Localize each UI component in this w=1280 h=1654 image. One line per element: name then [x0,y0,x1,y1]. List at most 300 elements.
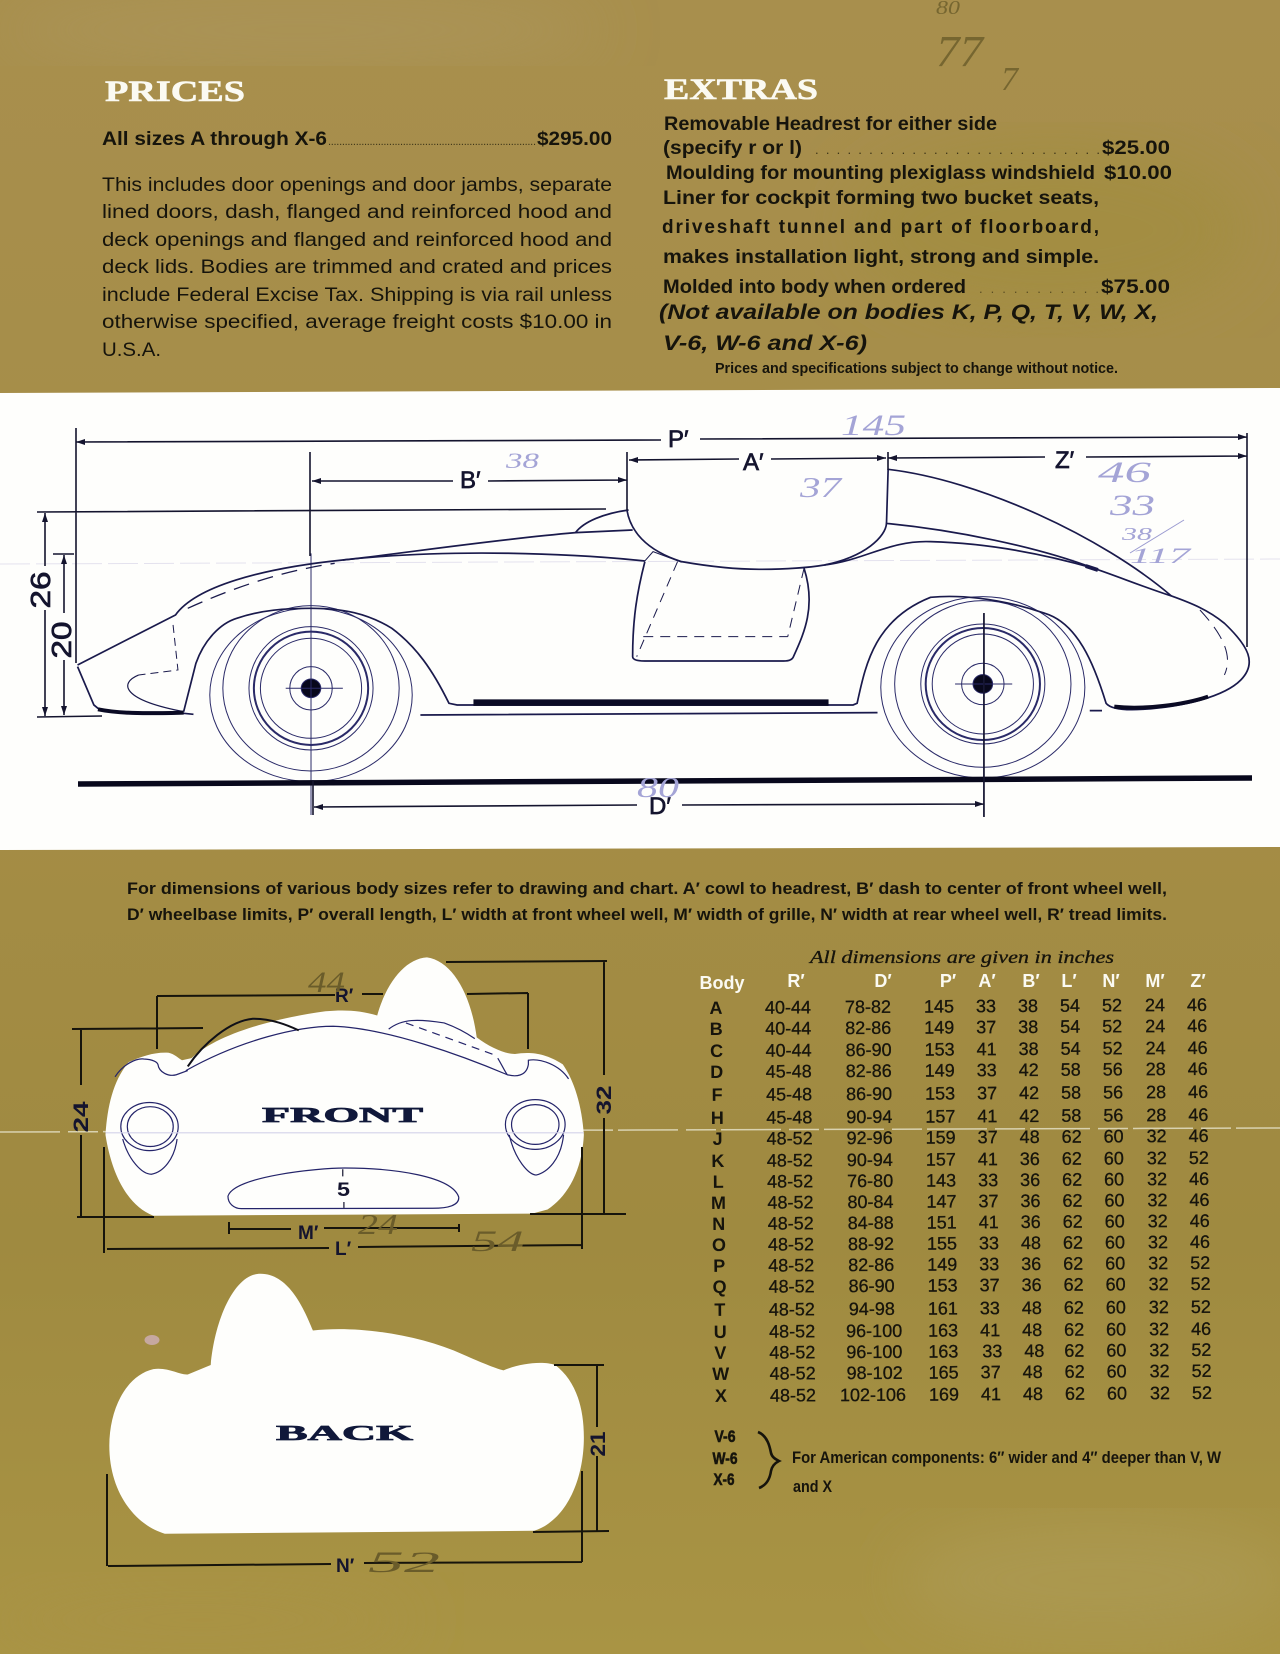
table header: L′ [1061,971,1077,991]
table rows: 163 [928,1341,958,1362]
table rows: 58 [1061,1106,1081,1126]
headrest fairing [888,469,1171,596]
table rows: 52 [1189,1148,1209,1168]
dimension labels [25,426,1075,820]
front view labels: 5 [337,1180,351,1201]
table rows: 84-88 [848,1213,894,1233]
back view labels [276,1421,610,1577]
table rows [709,995,1212,1406]
table rows: 62 [1063,1254,1083,1274]
table header [700,971,1206,993]
extras list: (specify r or l) [663,138,802,159]
table rows: 149 [927,1254,957,1275]
table rows: 147 [926,1191,957,1212]
handwritten numbers on front view: 24 [358,1210,398,1241]
table rows: 42 [1019,1106,1039,1126]
prices description: deck openings and flanged and reinforced hood and [102,230,612,251]
american components note: and X [793,1477,833,1496]
table rows: 48-52 [768,1276,815,1297]
table rows: 52 [1192,1361,1212,1381]
table rows: 60 [1106,1297,1126,1317]
table rows: 32 [1149,1319,1169,1339]
table rows: 33 [979,1233,999,1253]
prices description: otherwise specified, average freight costs $10.00 in [102,312,612,333]
table header: R′ [787,971,805,991]
table rows: 157 [925,1106,955,1127]
table rows: 60 [1105,1232,1125,1252]
handwritten notes top: 7 [1001,61,1020,98]
extras list: $10.00 [1104,163,1172,184]
heading: extras: EXTRAS [664,73,818,106]
front silhouette [105,957,584,1216]
table rows: 58 [1061,1060,1081,1080]
american components note [792,1448,1222,1496]
table rows: 36 [1020,1149,1040,1169]
table rows: 46 [1189,1169,1209,1189]
sills and bumpers [473,699,829,706]
price line: ........................................................................... [328,136,536,148]
table rows: 165 [929,1362,959,1383]
table rows: 36 [1020,1191,1041,1211]
front view labels: 24 [70,1101,93,1132]
table rows: 33 [976,996,996,1016]
table rows: 60 [1104,1126,1124,1146]
table rows: 40-44 [765,997,811,1018]
extras list: Prices and specifications subject to change without notice. [715,360,1118,377]
table rows: 163 [928,1320,958,1341]
extras list: Liner for cockpit forming two bucket seats, [663,188,1099,209]
table rows: T [714,1300,725,1320]
table rows: 96-100 [846,1321,902,1341]
table rows: 36 [1021,1275,1042,1295]
extras list: V-6, W-6 and X-6) [663,332,867,355]
table rows: 28 [1146,1105,1166,1125]
front view labels [70,986,616,1260]
table rows: 52 [1191,1297,1211,1317]
heading: prices: PRICES [105,75,245,108]
table rows: 42 [1019,1083,1039,1103]
table rows: 38 [1018,996,1038,1016]
back silhouette [109,1274,584,1534]
table rows: 32 [1150,1361,1170,1381]
hood dashes [188,563,335,608]
table rows: 62 [1065,1384,1085,1404]
table rows: 62 [1062,1149,1082,1169]
table rows: 45-48 [766,1107,812,1128]
table rows: 52 [1102,1016,1122,1036]
handwritten pencil numbers on side view [504,409,1192,804]
table rows: 46 [1189,1190,1210,1210]
table header: P′ [940,971,956,991]
table rows: 159 [926,1127,956,1148]
explanatory note: For dimensions of various body sizes refer to drawing and chart. A′ cowl to headrest, B′ dash to center of front wheel well, [127,879,1167,898]
table rows: 60 [1105,1274,1126,1294]
table rows: 60 [1106,1340,1126,1360]
back view dimension lines [107,1365,609,1566]
table rows: 52 [1190,1253,1210,1273]
table rows: 60 [1104,1169,1124,1189]
table rows: 46 [1187,1016,1207,1036]
handwritten notes top: 77 [936,27,985,76]
panel: extras [659,73,1172,377]
table rows: 48 [1020,1127,1040,1147]
handwritten numbers on front view [308,966,524,1258]
prices description: deck lids. Bodies are trimmed and crated and prices [102,257,612,278]
table rows: 41 [977,1106,997,1126]
table rows: V [714,1343,726,1363]
table rows: 62 [1064,1298,1084,1318]
table rows: 48-52 [767,1192,814,1213]
table rows: 40-44 [765,1018,811,1039]
back view labels: N′ [336,1556,355,1577]
table rows: 52 [1190,1274,1211,1294]
table rows: 41 [979,1212,999,1232]
handwritten pencil numbers on side view: 117 [1130,543,1192,568]
table rows: A [709,998,723,1018]
handwritten pencil numbers on side view: 145 [841,409,906,442]
table rows: 48 [1022,1320,1042,1340]
car side profile [78,469,1249,817]
table rows: 24 [1145,1016,1165,1036]
table rows: 33 [980,1298,1000,1318]
table header: M′ [1145,971,1165,991]
table rows: 52 [1102,1038,1123,1058]
extras list: . . . . . . . . . . . . . . . . . . . . . . . . . . . [815,142,1100,157]
table rows: 24 [1145,995,1165,1015]
table rows: 48-52 [767,1150,813,1171]
front view labels: R′ [335,986,354,1007]
back view labels: 21 [587,1431,610,1456]
table rows: 36 [1021,1254,1041,1274]
table rows: 48 [1021,1233,1041,1253]
handwritten pencil numbers on side view: 46 [1098,456,1151,489]
handwritten numbers on front view: 54 [471,1225,524,1258]
panel: prices [102,75,612,361]
six-cylinder body codes: W-6 [712,1449,738,1468]
table rows: 82-86 [846,1061,892,1081]
table rows: B [710,1019,723,1039]
table rows: 46 [1187,995,1207,1015]
table rows: 62 [1063,1275,1084,1295]
table rows: 48-52 [770,1385,816,1406]
front wheel [210,553,412,815]
table rows: 60 [1104,1148,1124,1168]
table rows: 60 [1104,1190,1125,1210]
price line [102,129,612,150]
table rows: 98-102 [847,1363,903,1383]
table rows: 32 [1147,1190,1168,1210]
table rows: 36 [1020,1170,1040,1190]
table rows: 54 [1060,1017,1080,1037]
table rows: 36 [1021,1212,1041,1232]
table rows: 58 [1061,1083,1081,1103]
table rows: 153 [924,1039,955,1060]
dimension labels: A′ [743,449,764,476]
six-cylinder body codes: X-6 [714,1470,734,1489]
table rows: 32 [1148,1211,1168,1231]
extras list: Removable Headrest for either side [664,114,997,135]
table rows: 96-100 [846,1342,902,1362]
table rows: 102-106 [840,1385,906,1405]
table header: Z′ [1190,971,1206,991]
table rows: 143 [926,1170,956,1191]
table rows: 48-52 [767,1128,813,1149]
table rows: 153 [927,1275,958,1296]
table rows: 38 [1018,1017,1038,1037]
paper spot [144,1335,160,1345]
table rows: 60 [1106,1319,1126,1339]
prices description: This includes door openings and door jambs, separate [102,175,612,196]
panel: front view [70,957,626,1260]
table rows: 80-84 [847,1192,894,1212]
table rows: 86-90 [848,1276,895,1296]
table header: A′ [978,971,996,991]
table rows: 48 [1023,1384,1043,1404]
table rows: 155 [927,1233,957,1254]
front view labels: M′ [298,1223,319,1244]
table caption: All dimensions are given in inches [809,947,1114,967]
table rows: 41 [978,1149,998,1169]
table rows: 46 [1191,1319,1211,1339]
handwritten pencil numbers on side view: 33 [1108,489,1155,522]
panel: dimension table [700,947,1222,1496]
table rows: 62 [1064,1320,1084,1340]
table rows: N [712,1214,725,1234]
table rows: 48-52 [768,1255,814,1276]
table header: B′ [1022,971,1040,991]
table rows: 151 [927,1212,957,1233]
front view labels: 32 [593,1086,616,1114]
table rows: 149 [925,1060,955,1081]
table rows: 48-52 [768,1234,814,1255]
table rows: 52 [1192,1383,1212,1403]
table rows: 32 [1150,1383,1170,1403]
table rows: 145 [924,996,954,1017]
explanatory note [127,879,1167,924]
table rows: W [712,1364,729,1384]
extras list: driveshaft tunnel and part of floorboard, [662,217,1099,238]
handwritten number on back view: 52 [368,1546,440,1579]
extras list: Moulding for mounting plexiglass windshield [666,163,1095,184]
table rows: 45-48 [766,1084,812,1105]
price line: $295.00 [537,129,612,150]
table rows: 32 [1147,1169,1167,1189]
dimension labels: P′ [668,426,689,453]
table rows: 37 [978,1127,998,1147]
table rows: 161 [928,1298,958,1319]
table rows: 48 [1023,1362,1043,1382]
table rows: 60 [1107,1383,1127,1403]
prices description [102,175,612,361]
table rows: 62 [1062,1170,1082,1190]
table rows: 37 [979,1275,1000,1295]
table rows: 48-52 [769,1299,815,1320]
table rows: O [712,1235,726,1255]
handwritten pencil numbers on side view: 38 [1120,524,1152,544]
table rows: U [714,1322,727,1342]
table rows: 62 [1063,1233,1083,1253]
front view labels: FRONT [262,1103,423,1127]
prices description: include Federal Excise Tax. Shipping is via rail unless [102,285,612,306]
table rows: 54 [1060,1039,1081,1059]
table rows: 169 [929,1384,959,1405]
table rows: 33 [979,1254,999,1274]
table rows: 32 [1149,1297,1169,1317]
table rows: 46 [1190,1232,1210,1252]
table rows: 24 [1145,1038,1166,1058]
table rows: P [713,1256,725,1276]
extras list: $75.00 [1101,277,1170,298]
table rows: 37 [977,1083,997,1103]
table rows: 56 [1103,1059,1123,1079]
table rows: 54 [1060,996,1080,1016]
table rows: 90-94 [847,1150,893,1170]
table rows: 62 [1063,1212,1083,1232]
table rows: 60 [1105,1211,1125,1231]
table rows: 32 [1148,1274,1169,1294]
dimension labels: 20 [46,622,77,658]
table rows: 48 [1024,1341,1044,1361]
back view labels: BACK [276,1421,414,1445]
table rows: 52 [1191,1340,1211,1360]
table rows: H [711,1108,724,1128]
door [633,562,809,661]
brace [758,1432,779,1488]
panel: back view [107,1274,610,1579]
table rows: 157 [926,1149,956,1170]
extras list: $25.00 [1102,138,1170,159]
handwritten pencil numbers on side view: 38 [504,448,539,473]
table rows: 52 [1102,995,1122,1015]
table rows: 48-52 [770,1363,816,1384]
table rows: 37 [981,1362,1001,1382]
table header: D′ [874,971,892,991]
table rows: 41 [976,1039,997,1059]
table rows: 48-52 [768,1213,814,1234]
table rows: 62 [1062,1127,1082,1147]
table rows: 62 [1064,1341,1084,1361]
table rows: 32 [1147,1126,1167,1146]
table rows: 45-48 [766,1061,812,1082]
extras list: . . . . . . . . . . . [979,281,1099,296]
table rows: 28 [1146,1082,1166,1102]
table rows: 86-90 [845,1040,892,1060]
extras list: makes installation light, strong and simple. [663,247,1099,268]
dimension labels: D′ [649,793,671,820]
table rows: 94-98 [849,1299,895,1319]
american components note: For American components: 6″ wider and 4″ deeper than V, W [792,1448,1222,1467]
table rows: 76-80 [847,1171,893,1191]
table header: N′ [1102,971,1120,991]
table rows: 48-52 [769,1342,815,1363]
front view line work [105,1019,584,1209]
extras list: (Not available on bodies K, P, Q, T, V, W, X, [659,301,1158,324]
table rows: 90-94 [846,1107,892,1127]
table rows: 56 [1103,1082,1123,1102]
table rows: 37 [978,1191,999,1211]
table rows: 46 [1187,1038,1208,1058]
table rows: 41 [981,1384,1001,1404]
table rows: K [711,1151,724,1171]
table rows: 42 [1019,1060,1039,1080]
table rows: M [711,1193,726,1213]
prices description: U.S.A. [102,340,161,361]
dimension labels: B′ [460,467,481,494]
table rows: 28 [1146,1059,1166,1079]
table rows: 46 [1189,1126,1209,1146]
handwritten pencil numbers on side view: 37 [799,473,842,504]
extras list [659,114,1172,377]
ground line [78,778,1252,784]
handwritten pencil numbers on side view: 80 [637,773,679,804]
panel: side view drawing [0,388,1280,850]
dimension lines [37,428,1247,817]
table rows: J [713,1129,723,1149]
table rows: 33 [978,1170,998,1190]
table rows: Q [712,1277,727,1297]
table rows: 46 [1188,1059,1208,1079]
table rows: 88-92 [848,1234,894,1254]
handwritten notes top [936,0,1020,98]
front view labels: L′ [335,1239,352,1260]
table rows: 46 [1188,1082,1208,1102]
table rows: 62 [1062,1191,1083,1211]
cockpit opening [627,469,888,569]
table rows: 48 [1022,1298,1042,1318]
table rows: 56 [1103,1105,1123,1125]
table rows: 33 [977,1060,997,1080]
table rows: 32 [1149,1340,1169,1360]
handwritten numbers on front view: 44 [308,966,345,999]
table rows: 60 [1107,1361,1127,1381]
nose details [139,625,178,675]
table rows: 82-86 [845,1018,891,1038]
white band [0,388,1280,850]
table rows: 37 [976,1017,996,1037]
six-cylinder body codes [712,1427,738,1489]
front view dimension lines [72,961,626,1253]
table rows: F [711,1085,723,1105]
table rows: 32 [1148,1253,1168,1273]
deck and scuttle lines [343,542,1094,568]
price line: All sizes A through X-6 [102,129,327,150]
table rows: 32 [1148,1232,1168,1252]
table rows: 41 [980,1320,1000,1340]
table rows: 46 [1190,1211,1210,1231]
table rows: 46 [1188,1105,1208,1125]
table rows: 48-52 [767,1171,813,1192]
table rows: 78-82 [845,997,891,1017]
dimension labels: Z′ [1055,447,1075,474]
table rows: 153 [925,1083,955,1104]
rear wheel [881,597,1085,817]
table rows: X [715,1386,727,1406]
table rows: 149 [924,1017,954,1038]
prices description: lined doors, dash, flanged and reinforced hood and [102,202,612,223]
table rows: 60 [1105,1253,1125,1273]
table rows: 40-44 [765,1040,812,1061]
table rows: 48-52 [769,1321,815,1342]
explanatory note: D′ wheelbase limits, P′ overall length, L′ width at front wheel well, M′ width of grille, N′ width at rear wheel well, R′ tread limits. [127,905,1167,924]
dimension labels: 26 [25,572,56,608]
table rows: 62 [1065,1362,1085,1382]
table rows: 38 [1018,1039,1039,1059]
table rows: 92-96 [847,1128,893,1148]
table header: Body [700,973,744,993]
table rows: D [710,1062,723,1082]
table rows: 32 [1147,1148,1167,1168]
table rows: L [713,1172,724,1192]
